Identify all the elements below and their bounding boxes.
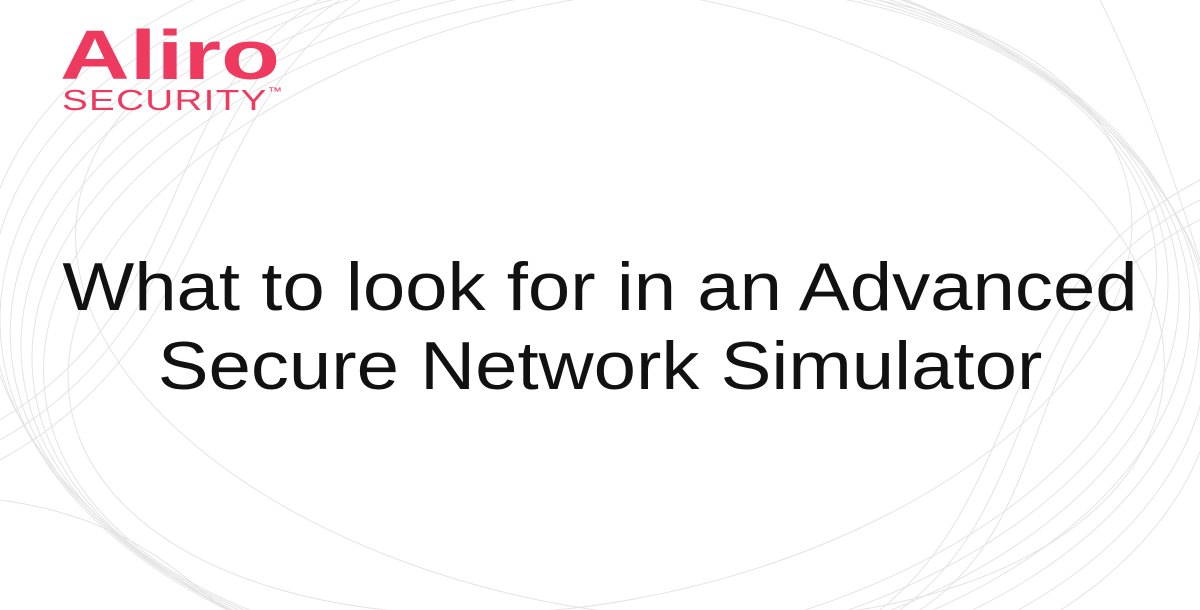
- title: What to look for in an Advanced: [62, 249, 1138, 325]
- logo subtitle: SECURITY™: [62, 85, 284, 117]
- title: [62, 249, 1138, 404]
- title: Secure Network Simulator: [158, 328, 1042, 404]
- logo: Aliro Security: [60, 16, 284, 117]
- logo wordmark: Aliro: [60, 16, 280, 94]
